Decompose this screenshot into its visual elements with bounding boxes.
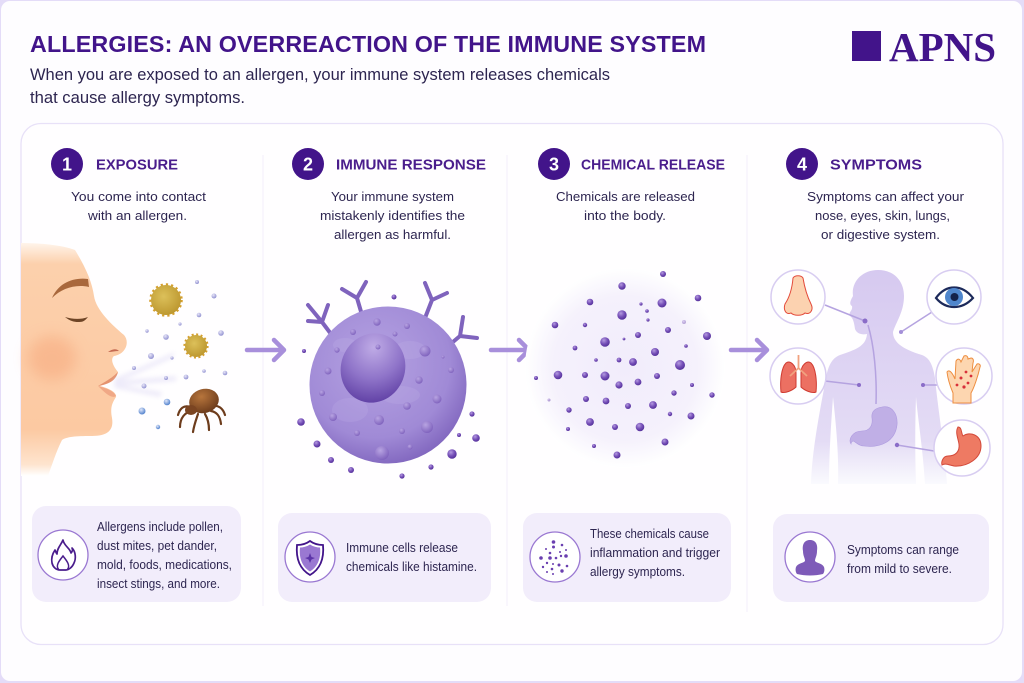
step 3 header <box>538 148 725 180</box>
step 3 description: into the body. <box>584 208 666 223</box>
illustration: allergen particles <box>132 280 227 429</box>
step 4 description: Symptoms can affect your <box>807 189 965 204</box>
step 1 description <box>71 189 206 223</box>
callout: immune cells: Immune cells release <box>346 541 458 555</box>
step 1 description: with an allergen. <box>87 208 187 223</box>
step 2 header <box>292 148 486 180</box>
step 2 description: mistakenly identifies the <box>320 208 465 223</box>
subtitle: When you are exposed to an allergen, your immune system releases chemicals <box>30 65 610 84</box>
icon: shield <box>285 532 335 582</box>
callout: inflammation: These chemicals cause <box>590 527 709 541</box>
step 2 description <box>320 189 465 242</box>
step 1 header: 1 <box>62 154 72 174</box>
callout: allergens: insect stings, and more. <box>97 577 220 591</box>
subtitle <box>30 65 610 107</box>
callout: allergens: dust mites, pet dander, <box>97 539 217 553</box>
step 1 description: You come into contact <box>71 189 206 204</box>
callout: severity <box>773 514 989 602</box>
illustration: breath stream <box>114 352 176 397</box>
arrow: exposure to immune response <box>247 340 284 360</box>
step 4 header <box>786 148 922 180</box>
callout: immune cells <box>278 513 491 602</box>
step 4 header: SYMPTOMS <box>830 156 922 174</box>
callout: allergens <box>32 506 241 602</box>
icon: lungs <box>770 348 826 404</box>
icon: particle cluster <box>530 532 580 582</box>
step 2 header: IMMUNE RESPONSE <box>336 156 486 174</box>
callout: inflammation: allergy symptoms. <box>590 565 685 579</box>
callout: immune cells: chemicals like histamine. <box>346 560 477 574</box>
icon: hand with rash <box>936 348 992 404</box>
illustration: chemical release cloud <box>525 268 725 468</box>
illustration: face profile breathing allergens <box>21 243 127 476</box>
icon: large pollen grain <box>150 284 182 316</box>
step 1 header <box>51 148 178 180</box>
main panel <box>21 124 1003 644</box>
callout: allergens: mold, foods, medications, <box>97 558 232 572</box>
title: ALLERGIES: AN OVERREACTION OF THE IMMUNE SYSTEM <box>30 31 706 57</box>
callout: allergens: Allergens include pollen, <box>97 520 223 534</box>
icon: small pollen grain <box>184 334 208 358</box>
step 3 description <box>556 189 695 223</box>
step 1 header: EXPOSURE <box>96 156 178 174</box>
step 3 header: CHEMICAL RELEASE <box>581 156 725 174</box>
step 4 header: 4 <box>797 154 807 174</box>
callout: severity: Symptoms can range <box>847 543 959 557</box>
icon: eye <box>927 270 981 324</box>
subtitle: that cause allergy symptoms. <box>30 88 245 107</box>
illustration: human body silhouette <box>811 270 947 484</box>
step 4 description: nose, eyes, skin, lungs, <box>815 208 950 223</box>
arrow: chemical release to symptoms <box>731 340 767 360</box>
callout: inflammation: inflammation and trigger <box>590 546 720 560</box>
icon: flame <box>38 530 88 580</box>
logo: APNS: APNS <box>889 24 996 70</box>
step 2 description: Your immune system <box>331 189 454 204</box>
icon: nose <box>771 270 825 324</box>
step 3 description: Chemicals are released <box>556 189 695 204</box>
callout: inflammation <box>523 513 731 602</box>
step 2 description: allergen as harmful. <box>334 227 451 242</box>
step 4 description: or digestive system. <box>821 227 940 242</box>
antibodies <box>308 282 477 347</box>
callout: severity: from mild to severe. <box>847 562 952 576</box>
arrow: immune response to chemical release <box>491 340 529 360</box>
connector lines to organs <box>825 305 937 451</box>
step 3 header: 3 <box>549 154 559 174</box>
icon: person <box>785 532 835 582</box>
illustration: immune cell <box>297 282 480 479</box>
icon: dust mite <box>178 386 225 432</box>
step 2 header: 2 <box>303 154 313 174</box>
step 4 description <box>807 189 965 242</box>
icon: stomach <box>934 420 990 476</box>
